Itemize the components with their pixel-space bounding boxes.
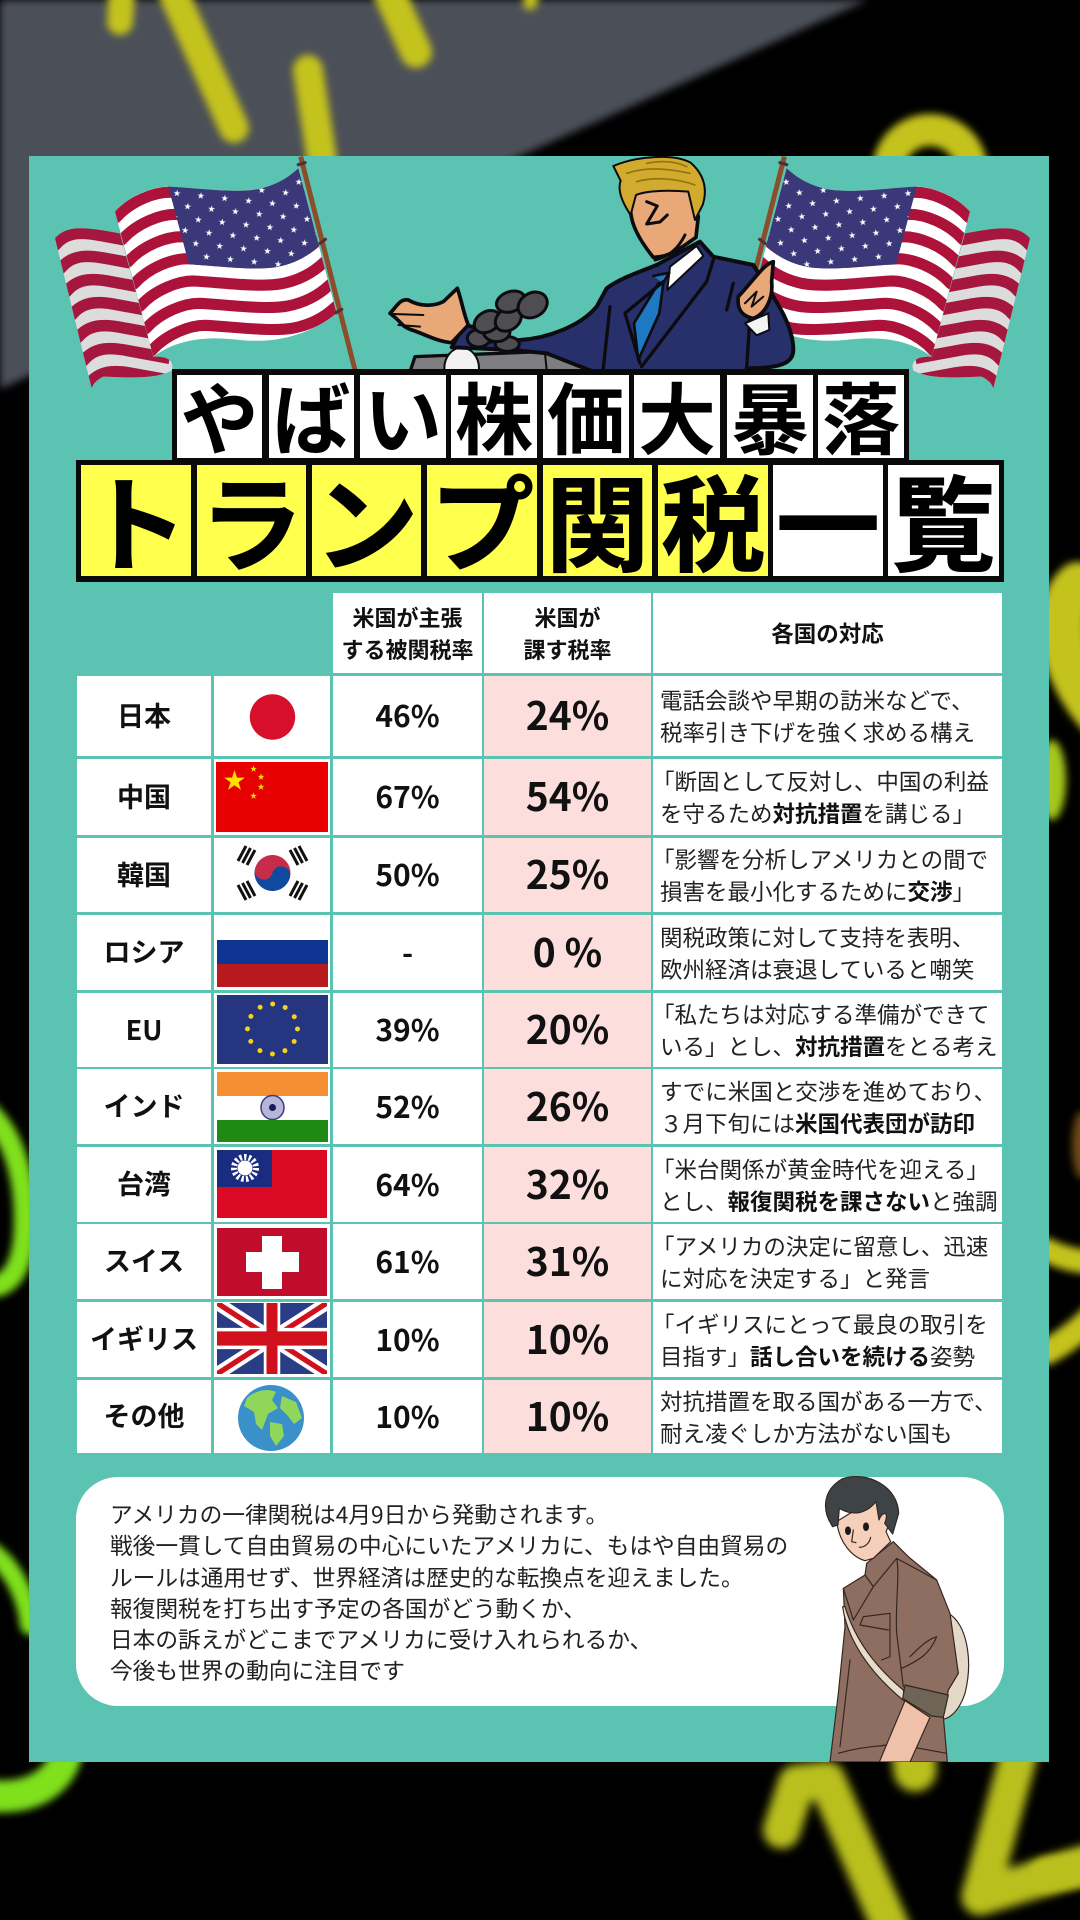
table row: South Korea <box>77 838 1002 912</box>
table row: Others <box>77 1380 1002 1453</box>
icon: Japan flag <box>214 676 330 756</box>
icon: UK flag <box>214 1302 330 1377</box>
table row: Taiwan: 32% <box>526 1154 609 1210</box>
table row: Taiwan <box>77 1147 1002 1222</box>
table row: UK <box>77 1302 1002 1377</box>
table row: Switzerland: に対応を決定する」と発言 <box>660 1262 930 1294</box>
table row: China: 「断固として反対し、中国の利益 <box>652 765 989 797</box>
header: imposed rate: 米国が <box>534 601 600 633</box>
title row 2: トランプ関税一覧 <box>76 460 1004 582</box>
table row: China: 中国 <box>117 776 171 814</box>
table row: Japan <box>77 676 1002 756</box>
table row: Taiwan: 64% <box>375 1160 440 1204</box>
illustration: young man with shoulder bag <box>824 1476 970 1762</box>
table row: South Korea: 「影響を分析しアメリカとの間で <box>652 843 988 875</box>
table row: India: ３月下旬には米国代表団が訪印 <box>660 1106 975 1138</box>
text block: summary: アメリカの一律関税は4月9日から発動されます。 <box>110 1497 608 1530</box>
table row: Russia: - <box>402 928 413 972</box>
table row: India: すでに米国と交渉を進めており、 <box>660 1074 996 1106</box>
table row: Taiwan: とし、報復関税を課さないと強調 <box>660 1184 998 1216</box>
header: imposed rate <box>484 593 651 673</box>
icon: China flag <box>214 759 330 835</box>
illustration: flags and speaker <box>55 156 1030 388</box>
table row: China: を守るため対抗措置を講じる」 <box>660 797 975 829</box>
table row: Russia: 関税政策に対して支持を表明、 <box>660 920 974 952</box>
table row: Russia: ロシア <box>104 931 184 970</box>
table row: EU: 39% <box>375 1006 440 1050</box>
table row: Switzerland: スイス <box>104 1240 184 1279</box>
table row: UK: 10% <box>375 1316 440 1360</box>
table row: UK: イギリス <box>90 1318 198 1357</box>
table row: Others: 10% <box>375 1392 440 1436</box>
icon: US flag left <box>40 157 355 397</box>
table row: China: 67% <box>375 773 440 817</box>
icon: Switzerland flag <box>214 1224 330 1299</box>
header: responses: 各国の対応 <box>771 617 884 649</box>
icon: EU flag <box>214 993 330 1067</box>
table row: Russia: 欧州経済は衰退していると嘲笑 <box>660 952 974 984</box>
icon: India flag <box>214 1069 330 1144</box>
header: claimed rate: する被関税率 <box>341 633 474 665</box>
text block: summary: ルールは通用せず、世界経済は歴史的な転換点を迎えました。 <box>110 1560 744 1593</box>
table row: Japan: 24% <box>526 686 609 742</box>
illustration: speaker at podium <box>390 157 793 389</box>
table row: India: インド <box>104 1085 184 1124</box>
table row: Switzerland: 31% <box>526 1232 609 1288</box>
table row: Taiwan: 台湾 <box>117 1163 171 1202</box>
table row: EU <box>77 993 1002 1067</box>
table row: South Korea: 25% <box>526 845 609 901</box>
callout: summary panel <box>76 1477 1004 1706</box>
table row: EU: 20% <box>526 1000 609 1056</box>
table row: South Korea: 韓国 <box>117 854 171 892</box>
table row: Others: 10% <box>526 1386 609 1442</box>
text block: summary: 今後も世界の動向に注目です <box>110 1653 405 1686</box>
table row: UK: 10% <box>526 1310 609 1366</box>
table row: Japan: 税率引き下げを強く求める構え <box>660 716 975 748</box>
table header <box>333 593 1002 673</box>
table row: Russia <box>77 915 1002 990</box>
table row: Others: 耐え凌ぐしか方法がない国も <box>660 1416 953 1448</box>
table row: Taiwan: 「米台関係が黄金時代を迎える」 <box>652 1152 989 1184</box>
panel: teal card <box>29 156 1049 1762</box>
header: responses <box>653 593 1002 673</box>
table row: Russia: 0 % <box>533 922 602 978</box>
table row: EU: 「私たちは対応する準備ができて <box>652 998 990 1030</box>
table row: South Korea: 50% <box>375 851 440 895</box>
table row: Japan: 電話会談や早期の訪米などで、 <box>660 684 974 716</box>
icon: Russia flag <box>214 915 330 990</box>
table row: Switzerland: 「アメリカの決定に留意し、迅速 <box>652 1230 988 1262</box>
table row: China: 54% <box>526 767 609 823</box>
table row: South Korea: 損害を最小化するために交渉」 <box>660 875 975 907</box>
table row: India: 52% <box>375 1082 440 1126</box>
table row: Japan: 日本 <box>117 694 171 734</box>
table row: Others: 対抗措置を取る国がある一方で、 <box>660 1384 997 1416</box>
title row 1: やばい株価大暴落 <box>172 369 909 460</box>
table row: EU: EU <box>126 1008 162 1048</box>
header: claimed rate: 米国が主張 <box>352 601 462 633</box>
table row: UK: 目指す」話し合いを続ける姿勢 <box>660 1340 975 1372</box>
text block: summary <box>110 1497 788 1686</box>
table row: China <box>77 759 1002 835</box>
text block: summary: 戦後一貫して自由貿易の中心にいたアメリカに、もはや自由貿易の <box>110 1528 788 1561</box>
icon: South Korea flag <box>214 838 330 912</box>
icon: globe <box>214 1380 330 1453</box>
table row: UK: 「イギリスにとって最良の取引を <box>652 1308 988 1340</box>
table row: Switzerland: 61% <box>375 1238 440 1282</box>
table row: Others: その他 <box>104 1395 184 1434</box>
table row: Switzerland <box>77 1224 1002 1299</box>
header: imposed rate: 課す税率 <box>523 633 612 665</box>
table row: India: 26% <box>526 1076 609 1132</box>
icon: Taiwan flag <box>214 1147 330 1222</box>
header: claimed rate <box>333 593 482 673</box>
text block: summary: 報復関税を打ち出す予定の各国がどう動くか、 <box>110 1591 586 1624</box>
icon: US flag right <box>730 157 1045 397</box>
table row: EU: いる」とし、対抗措置をとる考え <box>660 1030 998 1062</box>
table row: India <box>77 1069 1002 1144</box>
table row: Japan: 46% <box>375 692 440 736</box>
text block: summary: 日本の訴えがどこまでアメリカに受け入れられるか、 <box>110 1622 652 1655</box>
